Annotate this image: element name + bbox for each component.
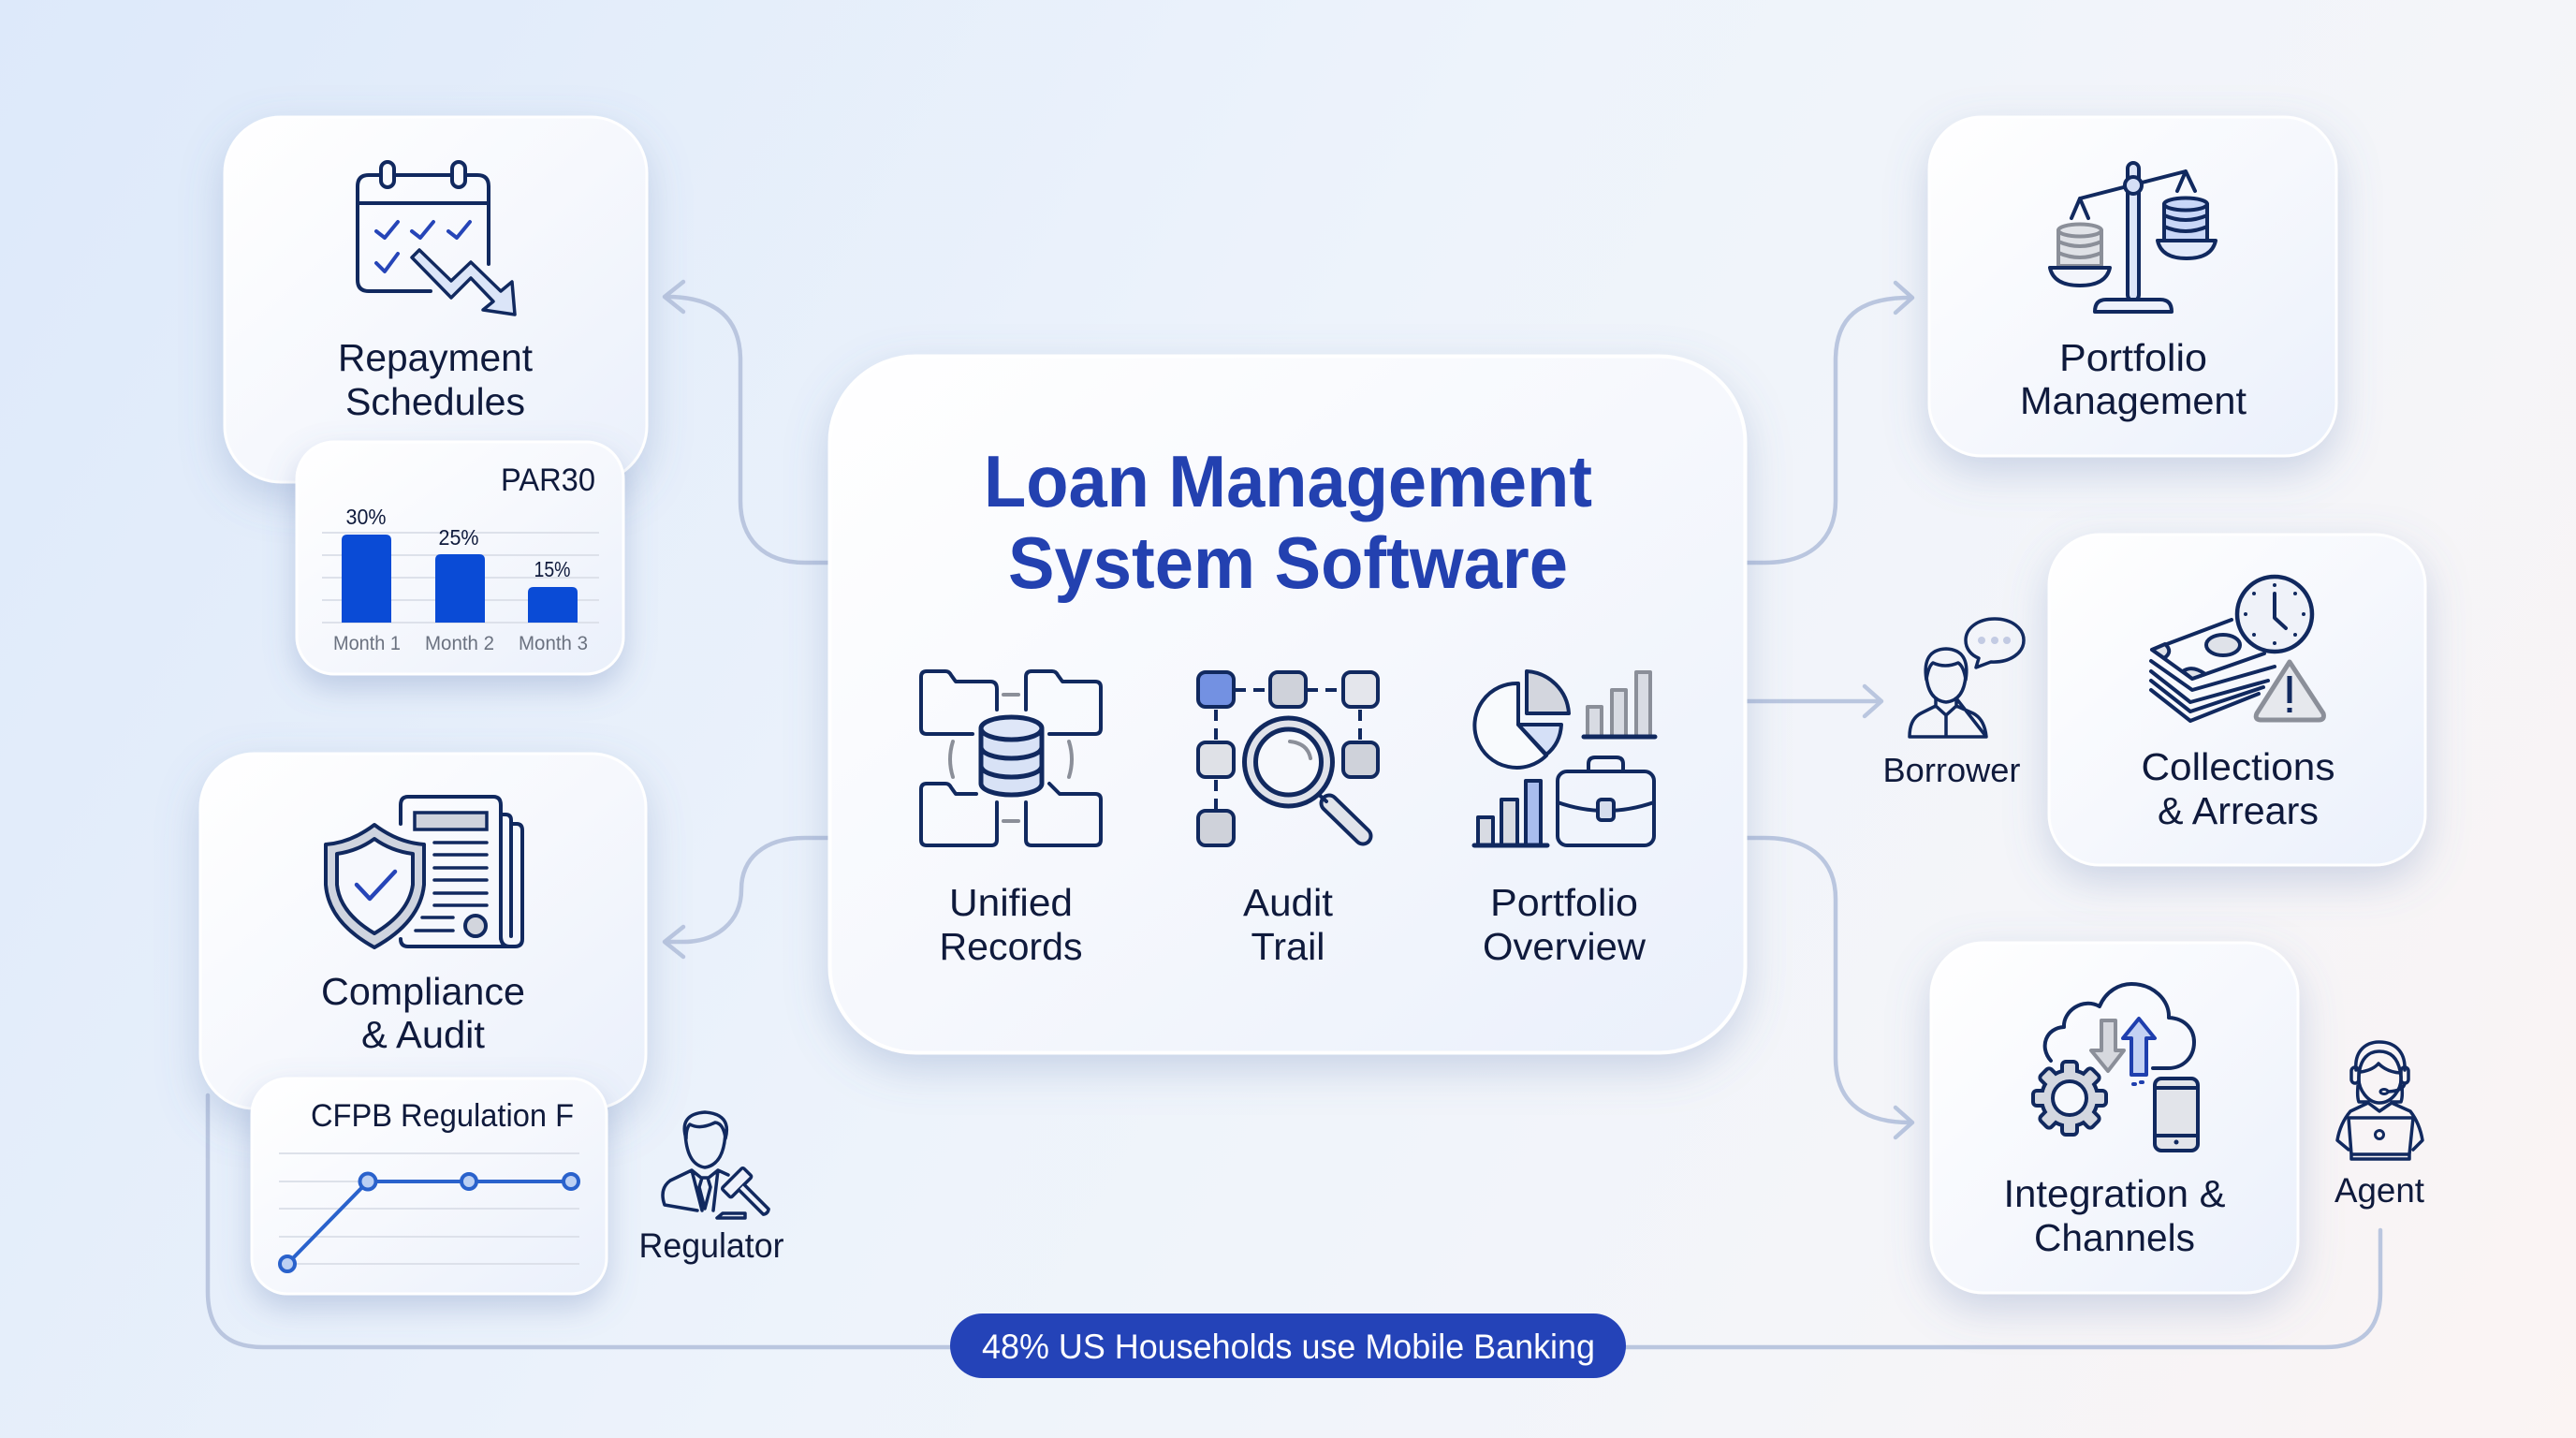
label: Portfolio Overview: Overview: [1483, 925, 1646, 968]
title: System Software: [1008, 521, 1568, 604]
label: Portfolio Overview: [1483, 881, 1646, 968]
label: Compliance and Audit: & Audit: [361, 1013, 486, 1056]
label: Collections and Arrears: Collections: [2142, 745, 2334, 788]
label: Portfolio Management: Management: [2020, 379, 2247, 422]
bar chart: PAR30 by month: 30%: [346, 505, 386, 529]
label: Collections and Arrears: & Arrears: [2158, 789, 2319, 832]
bar chart: PAR30 by month: 25%: [438, 525, 479, 550]
arrow: central system to Integration and Channels: [1747, 838, 1912, 1137]
bar chart: PAR30 by month: Month 3: [519, 633, 588, 654]
icon: balance scale with coins: [2050, 163, 2216, 312]
label: Integration and Channels: Channels: [2034, 1216, 2195, 1259]
icon: cloud, gear and phone: [2035, 984, 2198, 1151]
arrow: central system to Repayment Schedules: [665, 282, 828, 563]
panel: PAR30 bar chart card: [297, 442, 623, 674]
icon: agent with headset and laptop: [2337, 1042, 2422, 1159]
label: Agent: Agent: [2334, 1171, 2425, 1210]
heading: PAR30: PAR30: [501, 462, 595, 498]
icon: shield and document: [326, 797, 522, 947]
label: Portfolio Management: Portfolio: [2059, 336, 2207, 379]
panel: Compliance and Audit: [200, 754, 646, 1108]
label: Compliance and Audit: Compliance: [321, 970, 525, 1013]
icon: regulator with gavel: [663, 1112, 778, 1224]
label: Regulator: Regulator: [638, 1226, 784, 1265]
label: Collections and Arrears: [2142, 745, 2334, 832]
label: Audit Trail: Trail: [1251, 925, 1325, 968]
heading: CFPB Regulation F: CFPB Regulation F: [311, 1098, 574, 1134]
callout: mobile banking statistic pill: 48% US Households use Mobile Banking: [982, 1328, 1595, 1366]
icon: audit trail magnifier over nodes: [1198, 672, 1378, 845]
arrow: central system to Portfolio Management: [1747, 283, 1912, 563]
panel: CFPB Regulation F line chart card: [252, 1078, 607, 1294]
panel: Portfolio Management: [1929, 117, 2336, 456]
label: Compliance and Audit: [321, 970, 525, 1056]
bar chart: PAR30 by month: 15%: [534, 557, 571, 581]
label: Audit Trail: [1243, 881, 1334, 968]
bar chart: PAR30 by month: [322, 505, 599, 654]
arrow: central system to Compliance and Audit: [665, 838, 828, 957]
title: Loan Management: [984, 440, 1592, 522]
label: Audit Trail: Audit: [1243, 881, 1334, 924]
bar chart: PAR30 by month: Month 1: [333, 633, 401, 654]
title: [984, 440, 1592, 604]
bar chart: PAR30 by month: Month 2: [425, 633, 494, 654]
icon: unified records folders and database: [921, 671, 1101, 845]
panel: Integration and Channels: [1931, 943, 2298, 1293]
icon: borrower with speech bubble: [1910, 619, 2024, 737]
label: Integration and Channels: [2003, 1172, 2226, 1259]
label: Repayment Schedules: Repayment: [338, 336, 534, 379]
label: Portfolio Management: [2020, 336, 2247, 422]
label: Repayment Schedules: Schedules: [345, 380, 525, 423]
label: Portfolio Overview: Portfolio: [1490, 881, 1638, 924]
icon: portfolio overview charts and briefcase: [1474, 671, 1655, 845]
label: Unified Records: [940, 881, 1082, 968]
label: Repayment Schedules: [338, 336, 534, 423]
label: Unified Records: Unified: [949, 881, 1073, 924]
panel: Repayment Schedules: [225, 117, 647, 482]
icon: money stack with clock and warning: [2151, 577, 2323, 721]
line chart: [279, 1153, 579, 1271]
label: Unified Records: Records: [940, 925, 1082, 968]
label: Integration and Channels: Integration &: [2003, 1172, 2226, 1215]
label: Borrower: Borrower: [1883, 751, 2021, 789]
arrow: central system to Borrower: [1747, 686, 1881, 716]
panel: central Loan Management System Software: [829, 356, 1745, 1052]
connector: Regulator side to Agent side through statistic pill: [208, 1095, 2380, 1347]
panel: Collections and Arrears: [2049, 535, 2425, 865]
icon: calendar with falling arrow: [358, 162, 515, 315]
callout: mobile banking statistic pill: [950, 1313, 1626, 1378]
